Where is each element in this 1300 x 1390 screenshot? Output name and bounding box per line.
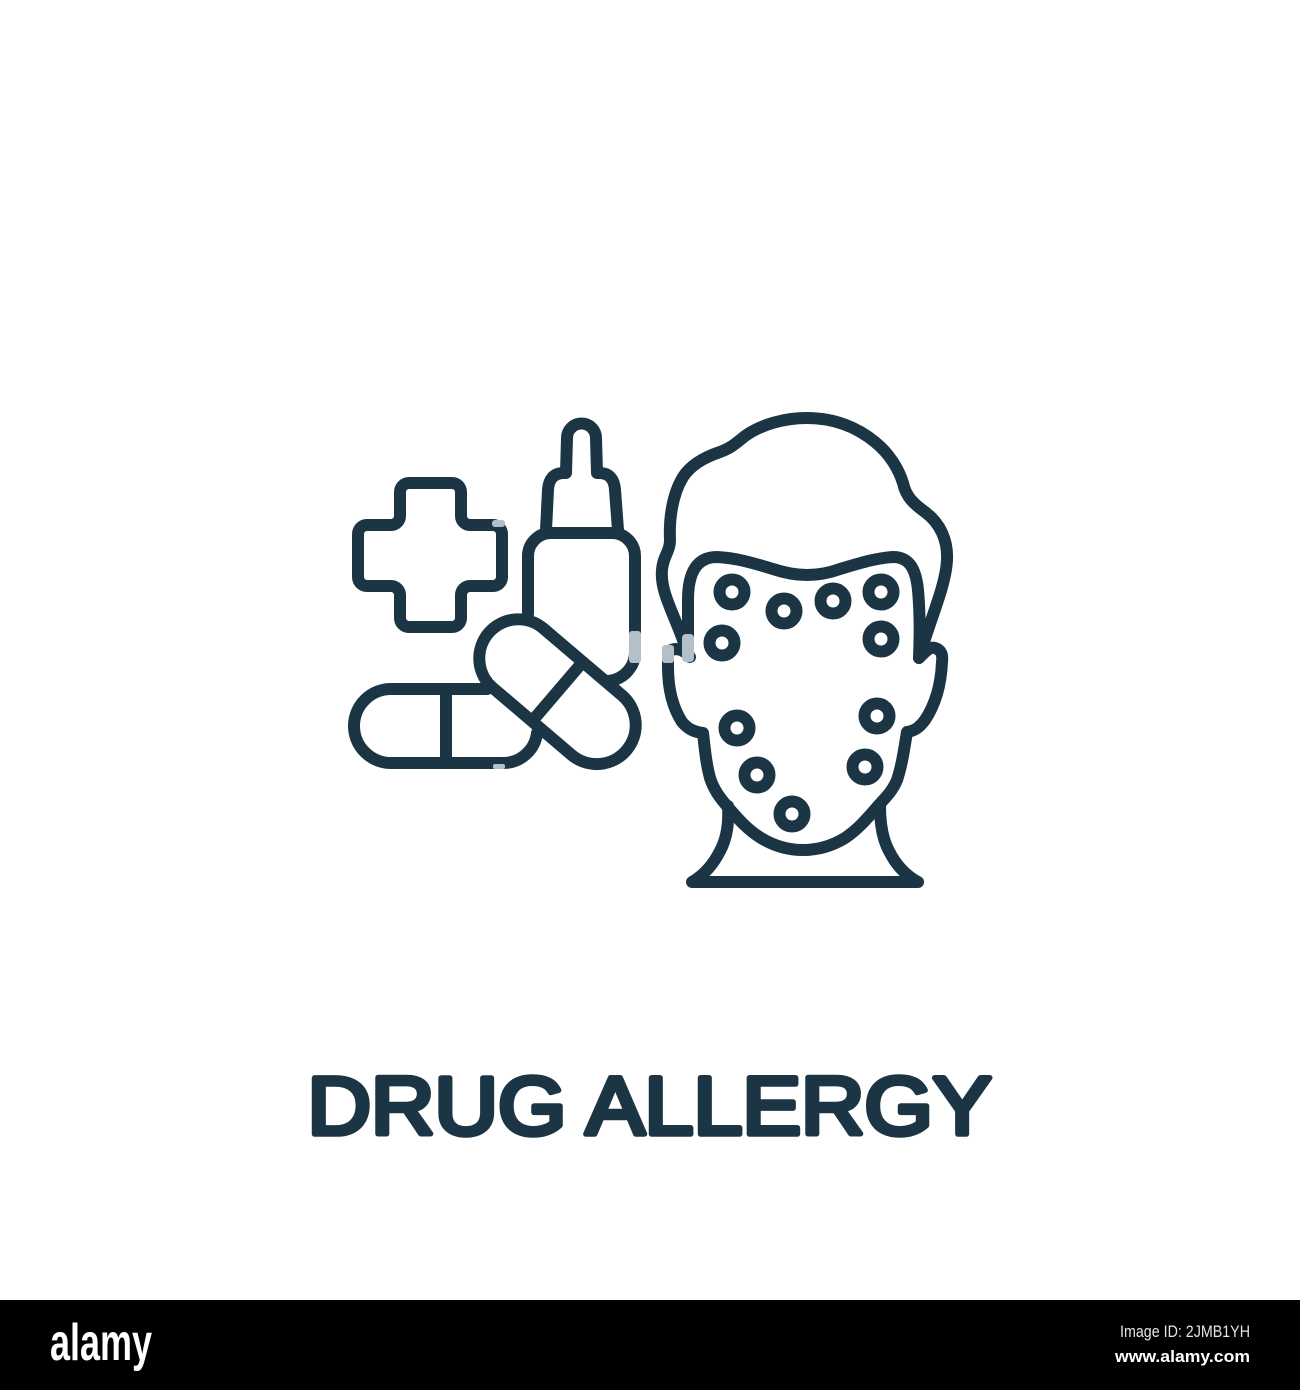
rash spots <box>710 580 894 826</box>
website: www.alamy.com <box>1114 1347 1250 1366</box>
watermark fragments <box>492 520 694 769</box>
icon: medical cross <box>358 483 502 627</box>
hairline and forehead <box>688 557 920 658</box>
hair outline <box>662 418 947 652</box>
icon: drug allergy illustration <box>354 418 947 882</box>
footer bar <box>0 1300 1300 1390</box>
icon: dropper bottle <box>528 424 635 681</box>
icon: head with rash <box>662 418 947 882</box>
icon: diagonal capsule <box>463 603 652 780</box>
neck and collar line <box>692 806 918 882</box>
footer logo: alamy <box>50 1314 152 1372</box>
face outline with ears and jaw <box>668 648 942 850</box>
icon: horizontal capsule <box>354 689 537 763</box>
image id: Image ID: 2JMB1YH <box>1120 1322 1250 1341</box>
title: DRUG ALLERGY <box>308 1061 992 1152</box>
